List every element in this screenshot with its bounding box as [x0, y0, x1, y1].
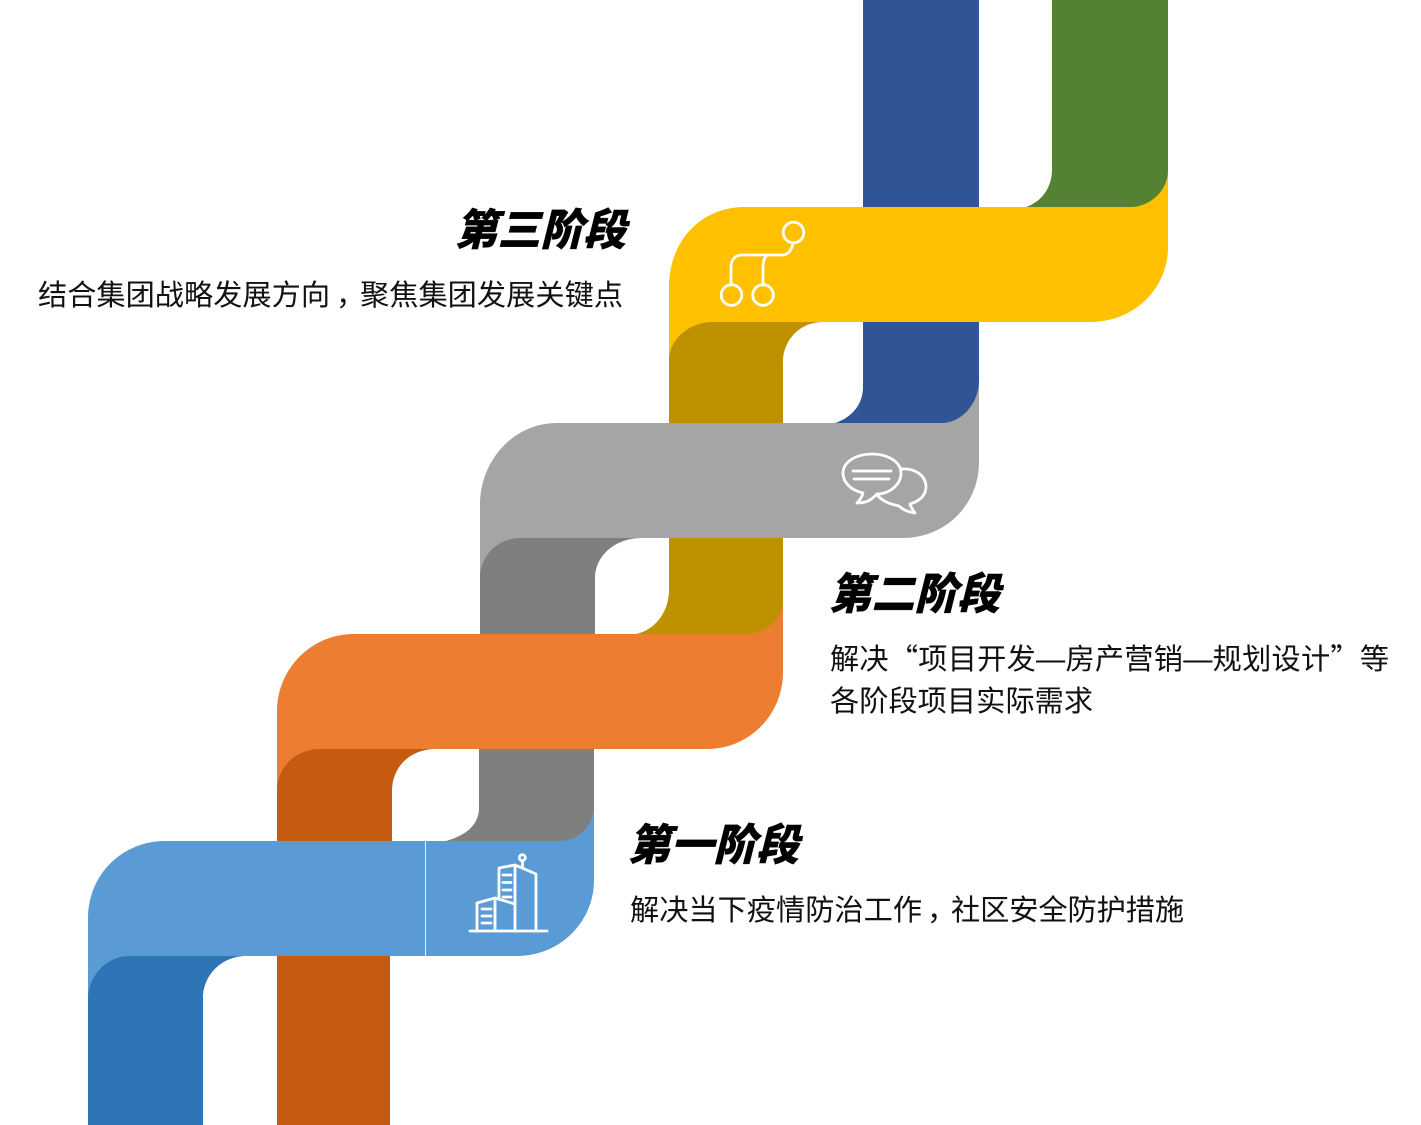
- description: stage one: 解决当下疫情防治工作: [630, 887, 922, 929]
- description continuation: stage two: 各阶段项目实际需求: [830, 678, 1093, 720]
- description: stage three: ，: [336, 272, 365, 314]
- vertical: dark blue: [88, 956, 246, 1125]
- vertical: green: [1026, 0, 1168, 207]
- description: stage three: 聚焦集团发展关键点: [360, 272, 623, 314]
- heading: stage one: 第一阶段: [628, 822, 803, 870]
- band: orange: [277, 590, 783, 800]
- ribbon graphic: four interlaced stages: [88, 0, 1168, 1125]
- icon: buildings: [470, 855, 547, 931]
- text block: stage one: [628, 822, 1184, 929]
- band crossing: gray over gold: [660, 423, 790, 538]
- vertical: gold: [636, 322, 823, 634]
- heading: stage two: 第二阶段: [829, 571, 1004, 619]
- vertical: dark gray: [446, 538, 641, 841]
- heading: stage three: 第三阶段: [455, 207, 630, 255]
- description: stage one: 社区安全防护措施: [951, 887, 1184, 929]
- text block: stage two: [829, 571, 1389, 720]
- description: stage three: 结合集团战略发展方向: [38, 272, 330, 314]
- text block: stage three: [38, 207, 630, 314]
- description: stage one: ，: [927, 887, 956, 929]
- icon: chat bubbles: [843, 454, 926, 513]
- description: stage two: 解决“项目开发—房产营销—规划设计”等: [830, 636, 1389, 678]
- description: stage three: [38, 272, 623, 314]
- band: gray: [480, 370, 979, 590]
- description: stage one: [630, 887, 1184, 929]
- icon: branching nodes: [721, 222, 804, 305]
- divider in light blue band: [425, 841, 426, 956]
- vertical: navy: [835, 0, 979, 423]
- band: yellow: [669, 165, 1168, 375]
- band crossing: orange over dark gray: [470, 634, 605, 749]
- vertical: dark orange: [277, 749, 436, 1125]
- band crossing: yellow over navy: [850, 207, 990, 322]
- band crossing: light blue over dark orange: [268, 841, 398, 956]
- band: light blue: [88, 795, 594, 1000]
